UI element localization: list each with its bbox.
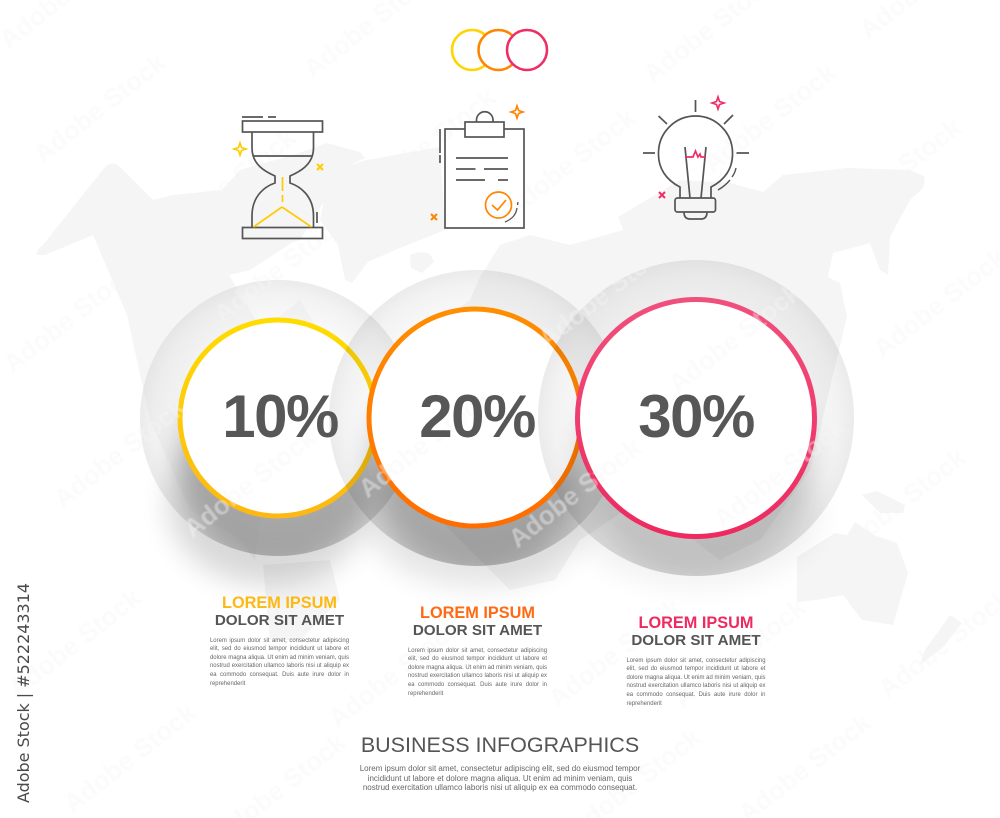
- connected circle group: [140, 260, 854, 587]
- body text column 3: Lorem ipsum dolor sit amet, consectetur adipiscing: [626, 658, 766, 664]
- body text column 3: ea commodo consequat. Duis aute irure dolor in: [626, 692, 766, 698]
- body text column 1: dolore magna aliqua. Ut enim ad minim veniam, quis: [210, 655, 349, 661]
- watermark pattern: Adobe Stock: [158, 122, 302, 244]
- heading: lorem ipsum pink: LOREM IPSUM: [639, 614, 753, 632]
- body text column 3: [626, 658, 766, 707]
- value: 10%: 10%: [222, 383, 338, 450]
- watermark pattern: Adobe Stock: [0, 257, 142, 379]
- watermark pattern: Adobe Stock: [323, 612, 467, 734]
- stock id label: Adobe Stock | #522243314: [14, 583, 33, 803]
- watermark pattern: Adobe Stock: [178, 422, 322, 544]
- watermark pattern: Adobe Stock: [358, 82, 502, 204]
- watermark pattern: Adobe Stock: [208, 207, 352, 329]
- intro paragraph: nostrud exercitation ullamco laboris nisi ut aliquip ex ea commodo consequat.: [363, 783, 637, 792]
- body text column 2: elit, sed do eiusmod tempor incididunt ut labore et: [408, 656, 547, 662]
- percentage values: [222, 383, 754, 450]
- map: new zealand: [920, 615, 962, 665]
- body text column 2: [408, 648, 547, 697]
- map: south america: [263, 560, 340, 640]
- intro paragraph: [360, 764, 640, 792]
- body text column 2: dolore magna aliqua. Ut enim ad minim veniam, quis: [408, 665, 547, 671]
- circle block: 10%: [140, 280, 416, 585]
- body text column 3: dolore magna aliqua. Ut enim ad minim veniam, quis: [626, 675, 766, 681]
- body text column 3: elit, sed do eiusmod tempor incididunt ut labore et: [626, 666, 766, 672]
- column 2 text: [408, 604, 547, 697]
- intro paragraph: incididunt ut labore et dolore magna aliqua. Ut enim ad minim veniam, quis: [368, 774, 632, 783]
- body text column 2: ea commodo consequat. Duis aute irure dolor in: [408, 682, 547, 688]
- watermark pattern: Adobe Stock: [698, 57, 842, 179]
- column 3 text: [626, 614, 766, 707]
- column 1 text: [210, 594, 349, 687]
- watermark pattern: Adobe Stock: [28, 47, 172, 169]
- watermark pattern: Adobe Stock: [503, 432, 647, 554]
- body text column 1: nostrud exercitation ullamco laboris nisi ut aliquip ex: [210, 663, 349, 669]
- body text column 1: [210, 638, 349, 687]
- icon: light bulb: [643, 97, 749, 219]
- intro paragraph: Lorem ipsum dolor sit amet, consectetur adipiscing elit, sed do eiusmod tempor: [360, 764, 640, 773]
- watermark pattern: Adobe Stock: [353, 382, 497, 504]
- watermark pattern: Adobe Stock: [668, 592, 812, 714]
- body text column 2: Lorem ipsum dolor sit amet, consectetur adipiscing: [408, 648, 547, 654]
- watermark pattern: Adobe Stock: [663, 277, 807, 399]
- subheading: dolor sit amet: DOLOR SIT AMET: [413, 622, 542, 639]
- icon: clipboard with check: [431, 106, 524, 228]
- map: indonesia island: [862, 491, 905, 513]
- map: eurasia and africa: [400, 168, 925, 590]
- heading: lorem ipsum orange: LOREM IPSUM: [420, 604, 535, 622]
- watermark pattern: Adobe Stock: [823, 112, 967, 234]
- watermark pattern: Adobe Stock: [498, 102, 642, 224]
- body text column 1: ea commodo consequat. Duis aute irure dolor in: [210, 672, 349, 678]
- body text column 2: nostrud exercitation ullamco laboris nisi ut aliquip ex: [408, 673, 547, 679]
- body text column 3: reprehenderit: [626, 701, 662, 707]
- map: north america: [37, 143, 365, 560]
- body text column 1: reprehenderit: [210, 681, 245, 687]
- map: greenland and europe: [320, 147, 445, 283]
- title: BUSINESS INFOGRAPHICS: [361, 733, 639, 757]
- watermark pattern: Adobe Stock: [3, 582, 147, 704]
- body text column 1: Lorem ipsum dolor sit amet, consectetur adipiscing: [210, 638, 349, 644]
- subheading: dolor sit amet: DOLOR SIT AMET: [215, 612, 344, 629]
- header logo: three overlapping rings: [452, 30, 547, 70]
- map: australia: [797, 522, 908, 625]
- circle block: 20%: [329, 270, 625, 587]
- body text column 2: reprehenderit: [408, 691, 443, 697]
- body text column 1: elit, sed do eiusmod tempor incididunt ut labore et: [210, 646, 349, 652]
- icon: hourglass: [234, 117, 323, 238]
- watermark pattern: Adobe Stock: [708, 412, 852, 534]
- subheading: dolor sit amet: DOLOR SIT AMET: [631, 632, 761, 649]
- world map background: [37, 143, 962, 665]
- value: 30%: 30%: [638, 383, 754, 450]
- watermark pattern: Adobe Stock: [58, 697, 202, 818]
- circle block: 30%: [538, 260, 854, 587]
- body text column 3: nostrud exercitation ullamco laboris nisi ut aliquip ex: [626, 683, 766, 689]
- watermark pattern: Adobe Stock: [533, 232, 677, 354]
- value: 20%: 20%: [419, 383, 535, 450]
- watermark pattern: Adobe Stock: [543, 592, 687, 714]
- heading: lorem ipsum yellow: LOREM IPSUM: [222, 594, 337, 612]
- map: iceland island: [410, 252, 434, 273]
- watermark pattern: Adobe Stock: [828, 442, 972, 564]
- watermark pattern: Adobe Stock: [48, 392, 192, 514]
